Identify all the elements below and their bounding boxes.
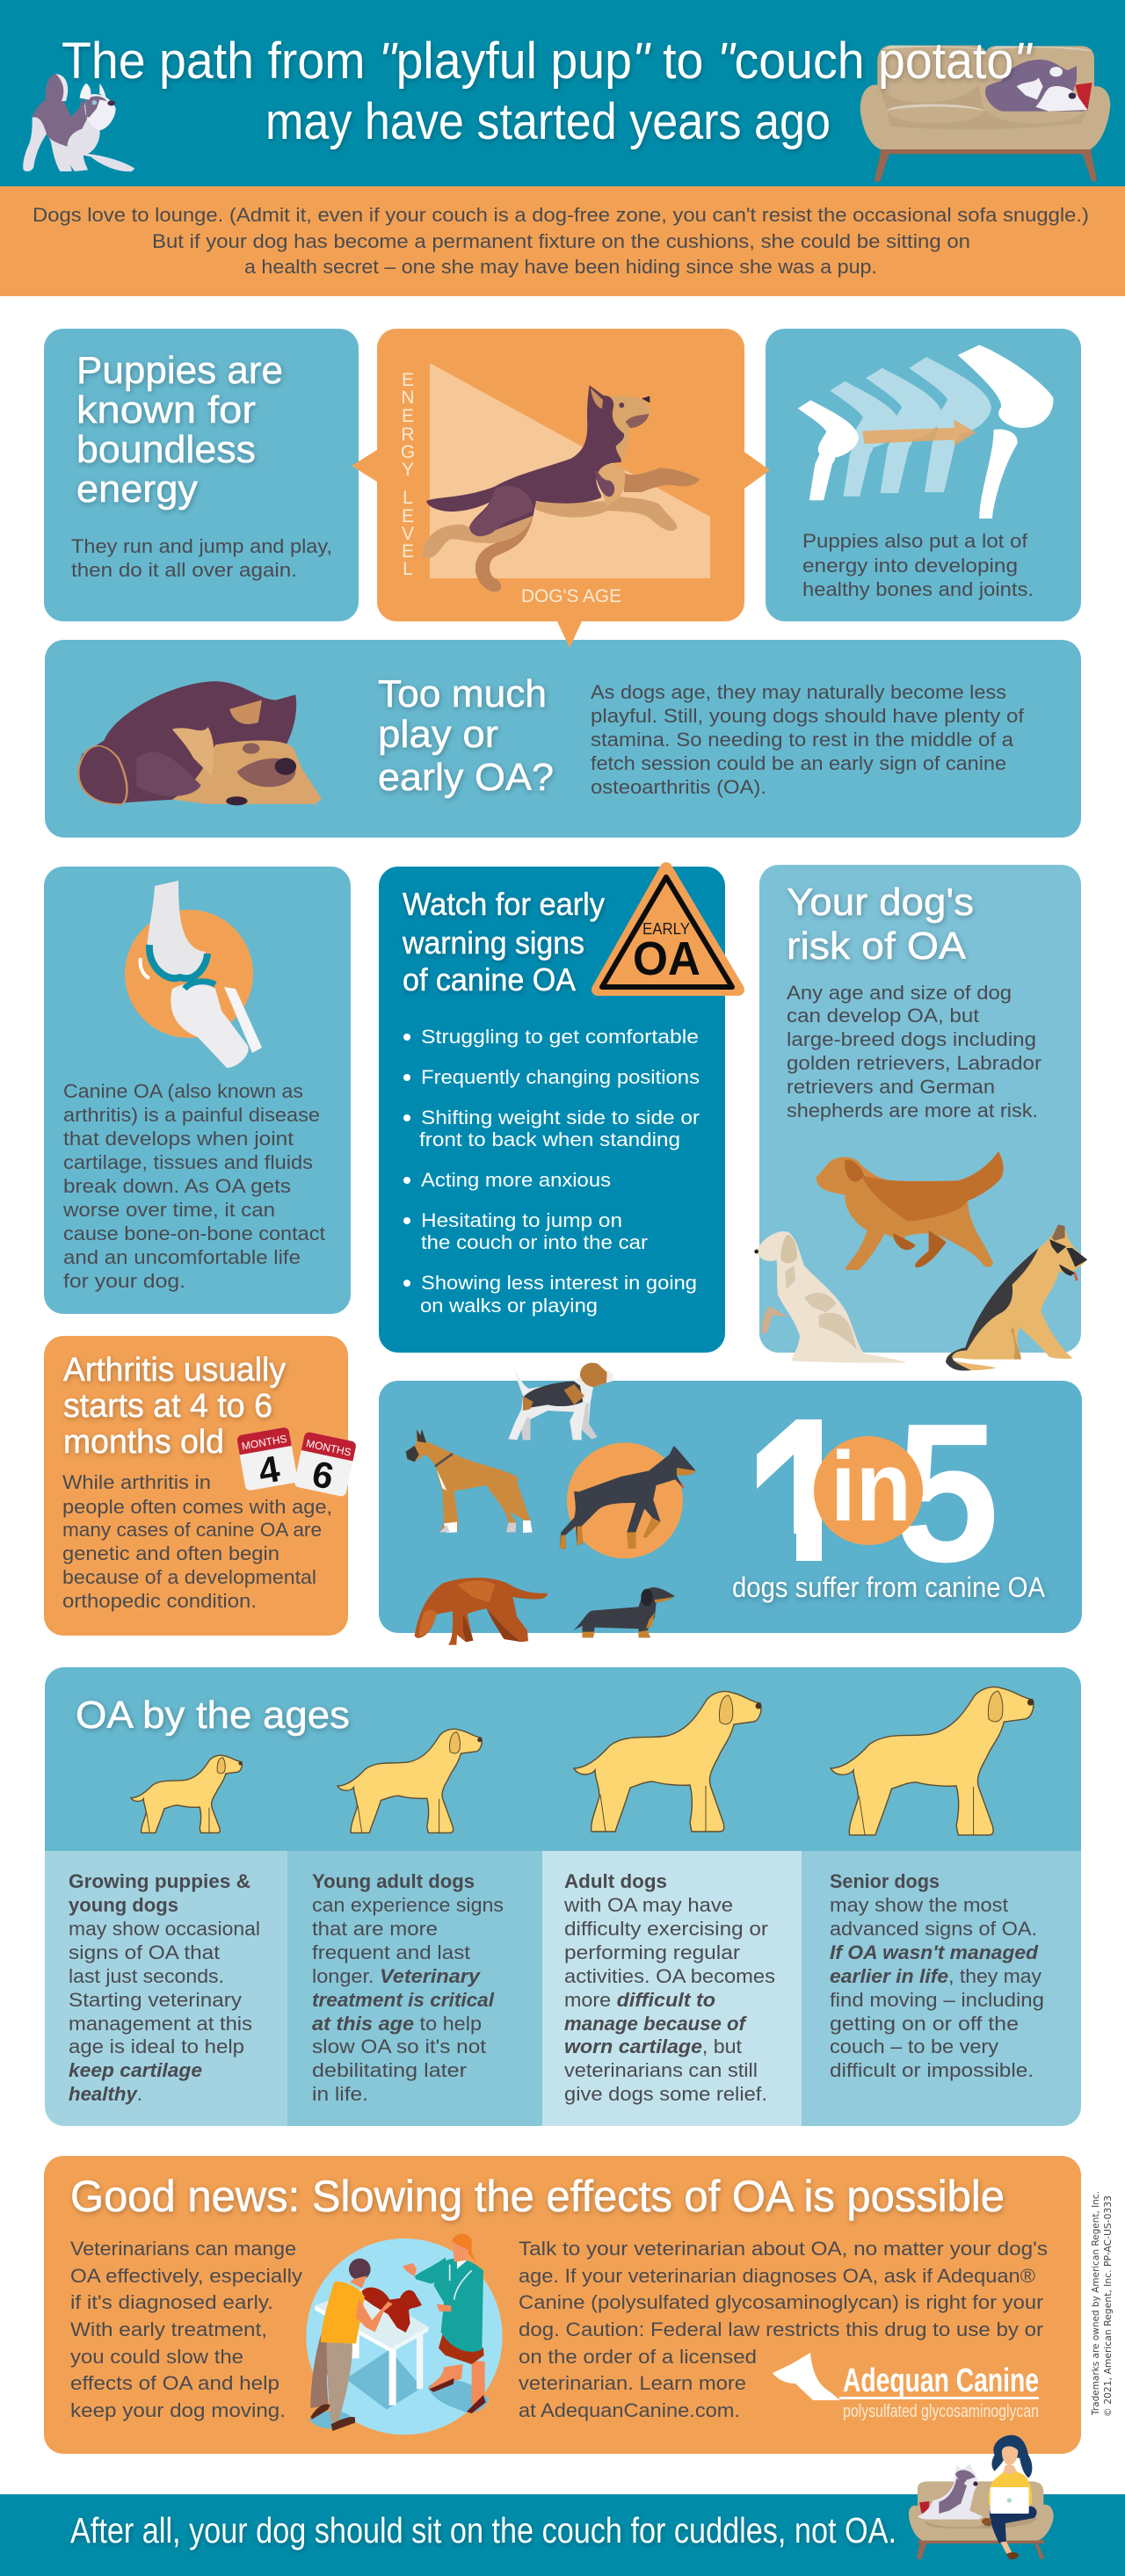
heading: arthritis: months old — [63, 1424, 224, 1461]
stat: 1 in 5: 1 — [766, 1382, 831, 1603]
text: adult dogs: with OA may have — [563, 1894, 733, 1916]
icon: growing bones — [798, 345, 1053, 519]
icon: woman and husky on couch — [909, 2435, 1054, 2559]
heading: OA by the ages: OA by the ages — [76, 1694, 350, 1737]
text: arthritis: many cases of canine OA are — [62, 1519, 322, 1541]
text: senior dogs — [830, 1870, 1044, 2081]
heading: arthritis — [63, 1352, 286, 1461]
text: canine OA — [62, 1080, 325, 1292]
text: arthritis: genetic and often begin — [62, 1542, 279, 1564]
text: adult dogs — [563, 1870, 775, 2105]
text: young adult dogs: slow OA so it's not — [312, 2035, 486, 2057]
heading: puppies: Puppies are — [76, 349, 283, 392]
arrow: left pointer — [352, 448, 380, 483]
text: talk to your vet: Canine (polysulfated glycosaminoglycan) is right for your — [519, 2291, 1043, 2313]
panel: puppies energy — [44, 329, 359, 621]
text: dogs suffer: dogs suffer from canine OA — [732, 1571, 1046, 1603]
heading: risk — [787, 881, 974, 968]
text: canine OA: cartilage, tissues and fluids — [63, 1151, 313, 1173]
text: arthritis — [62, 1471, 332, 1612]
text: canine OA: Canine OA (also known as — [63, 1080, 303, 1102]
list: warning signs: Struggling to get comfortable — [421, 1026, 699, 1048]
list: warning signs: on walks or playing — [420, 1295, 598, 1317]
legal text: Trademarks are owned by American Regent, Inc. — [1091, 2191, 1101, 2416]
text: talk to your vet: dog. Caution: Federal law restricts this drug to use by or — [519, 2318, 1043, 2340]
icon: jumping shepherd — [422, 385, 700, 591]
text: arthritis: because of a developmental — [62, 1566, 316, 1588]
icon: young adult dog — [338, 1729, 483, 1832]
footer band — [0, 2494, 1125, 2576]
text: risk: shepherds are more at risk. — [787, 1099, 1038, 1121]
text: senior dogs: difficult or impossible. — [830, 2059, 1034, 2081]
text: growing puppies: Starting veterinary — [69, 1989, 242, 2011]
text: young adult dogs: Young adult dogs — [312, 1870, 475, 1892]
heading: puppies: known for — [76, 388, 256, 432]
icon: calendar 4 months: 4 — [256, 1448, 283, 1491]
legal text — [1091, 2191, 1114, 2417]
text: growing puppies: healthy. — [69, 2083, 142, 2105]
text: as dogs age: As dogs age, they may naturally become less — [591, 681, 1006, 703]
icon: calendar 4 months — [236, 1426, 299, 1495]
text: senior dogs: getting on or off the — [830, 2013, 1019, 2035]
list: warning signs: front to back when standing — [419, 1128, 680, 1150]
text: young adult dogs: can experience signs — [312, 1894, 504, 1916]
text: growing puppies: young dogs — [69, 1894, 178, 1916]
text: canine OA: worse over time, it can — [62, 1199, 275, 1221]
text: growing puppies: age is ideal to help — [69, 2035, 244, 2057]
text: veterinarians: if it's diagnosed early. — [70, 2291, 273, 2313]
text: adult dogs: worn cartilage , but — [564, 2035, 742, 2057]
list: warning signs: Shifting weight side to side or — [421, 1107, 700, 1128]
text: growing puppies: Growing puppies & — [69, 1870, 250, 1892]
text: growing puppies: may show occasional — [69, 1918, 260, 1940]
heading: arthritis: starts at 4 to 6 — [63, 1388, 272, 1425]
icon: knee joint — [125, 881, 262, 1068]
text: adult dogs: performing regular — [564, 1941, 740, 1963]
list: warning signs: Acting more anxious — [421, 1169, 611, 1191]
stat: 1 in 5: in — [831, 1432, 911, 1542]
text: growing puppies: keep cartilage — [69, 2059, 202, 2081]
text: young adult dogs: treatment is critical — [312, 1989, 495, 2011]
list: warning signs: Showing less interest in going — [421, 1272, 697, 1294]
panel: too much play — [45, 640, 1081, 838]
panel: bones and joints — [766, 329, 1081, 621]
axis label: energy level: ENERGYLEVEL — [401, 370, 415, 579]
intro band: a health secret – one she may have been hiding since she was a pup. — [244, 256, 877, 278]
list: warning signs: Frequently changing positions — [421, 1066, 700, 1088]
heading: arthritis: Arthritis usually — [63, 1352, 286, 1389]
text: veterinarians: you could slow the — [70, 2346, 243, 2368]
intro band: But if your dog has become a permanent fixture on the cushions, she could be sitting on — [152, 230, 970, 252]
text: veterinarians: Veterinarians can mange — [70, 2238, 296, 2260]
text: senior dogs: advanced signs of OA. — [830, 1918, 1037, 1940]
text: canine OA: and an uncomfortable life — [63, 1246, 301, 1268]
text: talk to your vet — [519, 2238, 1048, 2421]
text: growing puppies: management at this — [69, 2013, 252, 2035]
panel: canine OA explanation — [44, 867, 351, 1314]
icon: sitting german shepherd — [946, 1224, 1087, 1371]
legal text: © 2021, American Regent, Inc. PP-AC-US-0333 — [1103, 2195, 1114, 2417]
icon: early OA sign: OA — [633, 932, 700, 985]
text: risk: Any age and size of dog — [787, 982, 1012, 1004]
text: talk to your vet: at AdequanCanine.com. — [519, 2399, 740, 2421]
text: adult dogs: Adult dogs — [564, 1870, 667, 1892]
heading: warning signs: of canine OA — [403, 961, 576, 998]
arrow: right pointer — [742, 450, 770, 490]
heading: good news: Good news: Slowing the effects of OA is possible — [70, 2172, 1005, 2221]
text: senior dogs: may show the most — [830, 1894, 1008, 1916]
chart: energy decline — [430, 363, 710, 578]
intro band — [0, 186, 1125, 296]
text: risk: large-breed dogs including — [787, 1028, 1036, 1050]
text: adult dogs: manage because of — [564, 2013, 748, 2035]
text: adult dogs: give dogs some relief. — [564, 2083, 767, 2105]
icon: calendar 6 months: 6 — [308, 1453, 338, 1498]
text: young adult dogs: debilitating later — [312, 2059, 467, 2081]
title: may have started years ago — [265, 93, 831, 150]
heading: puppies — [76, 349, 283, 511]
axis label: dog's age: DOG'S AGE — [521, 586, 621, 606]
text: canine OA: for your dog. — [63, 1270, 185, 1292]
text: talk to your vet: on the order of a licensed — [519, 2346, 757, 2368]
text: veterinarians: keep your dog moving. — [70, 2399, 286, 2421]
text: young adult dogs: frequent and last — [312, 1941, 470, 1963]
text: puppies also: healthy bones and joints. — [802, 578, 1034, 600]
text: young adult dogs — [312, 1870, 504, 2105]
panel: warning signs — [379, 867, 738, 1353]
icon: couch with sleeping husky — [860, 46, 1110, 182]
text: talk to your vet: Talk to your veterinarian about OA, no matter your dog's — [519, 2238, 1048, 2260]
text: veterinarians: OA effectively, especially — [70, 2265, 302, 2287]
icon: calendar 6 months: MONTHS — [305, 1437, 352, 1459]
icon: calendar 6 months — [293, 1431, 357, 1500]
list: warning signs — [403, 1026, 700, 1317]
icon: calendar 4 months: MONTHS — [241, 1433, 288, 1453]
text: growing puppies — [69, 1870, 260, 2105]
text: as dogs age: playful. Still, young dogs should have plenty of — [591, 705, 1025, 727]
text: growing puppies: last just seconds. — [69, 1965, 224, 1987]
icon: cream retriever — [754, 1231, 907, 1363]
heading: warning signs — [402, 886, 605, 998]
text: closing line: After all, your dog should sit on the couch for cuddles, not OA. — [70, 2510, 896, 2551]
text: risk: golden retrievers, Labrador — [787, 1052, 1042, 1074]
icon: early OA sign: EARLY — [642, 920, 690, 938]
panel: OA by the ages — [45, 1667, 1081, 2126]
text: risk: retrievers and German — [787, 1076, 995, 1098]
text: senior dogs: earlier in life , they may — [830, 1965, 1042, 1987]
icon: vet exam scene — [306, 2234, 503, 2435]
list: warning signs: Hesitating to jump on — [421, 1209, 622, 1231]
text: as dogs age: fetch session could be an early sign of canine — [591, 752, 1006, 774]
text: adult dogs: more difficult to — [564, 1989, 715, 2011]
text: as dogs age: osteoarthritis (OA). — [591, 776, 766, 798]
heading: puppies: energy — [76, 468, 198, 511]
text: as dogs age — [591, 681, 1025, 798]
icon: resting shepherd — [78, 681, 322, 805]
text: adult dogs: veterinarians can still — [564, 2059, 758, 2081]
text: senior dogs: couch – to be very — [830, 2035, 998, 2057]
arrow: down pointer — [556, 620, 583, 648]
panel: risk of OA — [754, 865, 1087, 1371]
text: puppies also: energy into developing — [802, 555, 1018, 577]
text: canine OA: arthritis) is a painful disease — [63, 1104, 320, 1126]
text: adult dogs: activities. OA becomes — [564, 1965, 775, 1987]
title: The path from "playful pup" to "couch potato" — [62, 33, 1033, 90]
text: risk — [787, 982, 1042, 1121]
text: canine OA: cause bone-on-bone contact — [63, 1223, 325, 1244]
text: veterinarians: effects of OA and help — [70, 2372, 279, 2394]
text: they run: then do it all over again. — [71, 559, 297, 581]
text: young adult dogs: at this age to help — [312, 2013, 482, 2035]
text: arthritis: orthopedic condition. — [62, 1590, 257, 1612]
heading: too much play — [378, 672, 554, 799]
heading: puppies: boundless — [76, 428, 256, 471]
heading: too much play: early OA? — [378, 756, 554, 799]
icon: playful husky — [23, 74, 134, 171]
title — [62, 33, 1033, 150]
text: puppies also: Puppies also put a lot of — [802, 530, 1028, 552]
heading: risk: risk of OA — [787, 925, 967, 968]
icon: dogs group — [406, 1363, 696, 1645]
text: talk to your vet: age. If your veterinarian diagnoses OA, ask if Adequan® — [519, 2265, 1035, 2287]
text: puppies also — [802, 530, 1034, 600]
stat: 1 in 5 — [743, 1382, 999, 1603]
icon: golden retriever — [816, 1151, 1004, 1270]
text: young adult dogs: longer. Veterinary — [312, 1965, 482, 1987]
stat: 1 in 5: 5 — [895, 1382, 999, 1603]
text: veterinarians: With early treatment, — [70, 2318, 267, 2340]
text: senior dogs: If OA wasn't managed — [830, 1941, 1039, 1963]
logo: Adequan Canine: Adequan Canine — [843, 2362, 1039, 2399]
panel: 1 in 5 — [379, 1363, 1082, 1645]
text: veterinarians — [70, 2238, 302, 2421]
icon: adult dog — [574, 1691, 761, 1832]
logo: Adequan Canine — [773, 2353, 1039, 2421]
text: canine OA: break down. As OA gets — [63, 1175, 291, 1197]
text: arthritis: people often comes with age, — [62, 1496, 332, 1518]
icon: early OA sign — [598, 868, 738, 990]
text: as dogs age: stamina. So needing to rest in the middle of a — [591, 729, 1014, 751]
icon: puppy — [131, 1755, 243, 1832]
heading: too much play: Too much — [378, 672, 547, 715]
list: warning signs: the couch or into the car — [421, 1231, 648, 1253]
text: senior dogs: find moving – including — [830, 1989, 1044, 2011]
heading: too much play: play or — [378, 713, 498, 756]
heading: warning signs: Watch for early — [403, 886, 605, 922]
text: talk to your vet: veterinarian. Learn more — [519, 2372, 746, 2394]
heading: warning signs: warning signs — [402, 925, 584, 961]
intro band: Dogs love to lounge. (Admit it, even if your couch is a dog-free zone, you can't resist the occasional sofa snuggle.) — [33, 204, 1089, 226]
panel: good news — [44, 2156, 1081, 2454]
icon: senior dog — [831, 1687, 1034, 1835]
text: they run — [71, 535, 332, 581]
text: young adult dogs: in life. — [312, 2083, 368, 2105]
text: senior dogs: Senior dogs — [830, 1870, 940, 1892]
panel: arthritis age — [44, 1336, 357, 1636]
text: adult dogs: difficulty exercising or — [564, 1918, 768, 1940]
text: they run: They run and jump and play, — [71, 535, 332, 557]
text: canine OA: that develops when joint — [63, 1128, 294, 1150]
text: young adult dogs: that are more — [312, 1918, 438, 1940]
panel: energy chart — [352, 329, 770, 648]
text: risk: can develop OA, but — [787, 1005, 979, 1027]
heading: risk: Your dog's — [787, 881, 974, 924]
header band — [0, 0, 1125, 186]
logo: Adequan Canine: polysulfated glycosaminoglycan — [843, 2402, 1039, 2421]
text: arthritis: While arthritis in — [62, 1471, 211, 1493]
text: growing puppies: signs of OA that — [69, 1941, 220, 1963]
